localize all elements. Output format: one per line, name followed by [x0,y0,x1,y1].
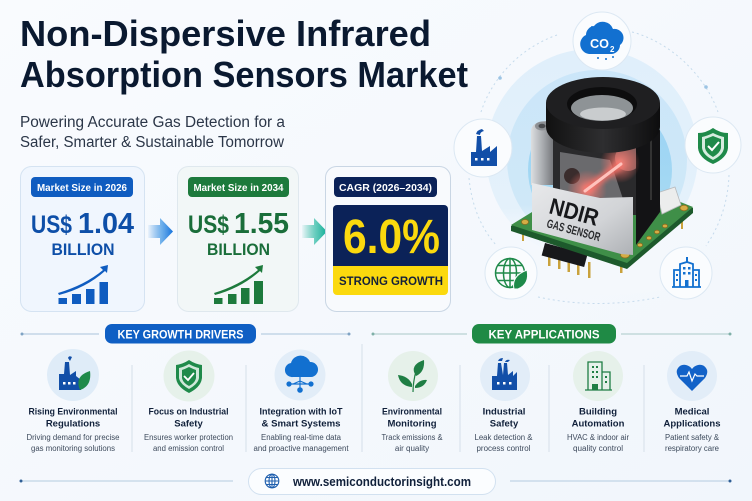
title [20,13,468,95]
application: medical applications: respiratory care [665,444,720,453]
footer: website pill: www.semiconductorinsight.com [292,475,471,489]
left silver column [531,121,553,185]
panel: market size 2026: US$ [31,211,72,239]
laser beam [600,143,640,183]
driver: rising environmental regulations: Driving demand for precise [26,433,120,442]
application: medical applications: Medical [675,406,709,418]
icon: factory [492,358,517,390]
illustration: NDIR gas sensor: GAS SENSOR [545,216,602,244]
application: building automation: quality control [573,444,623,453]
driver: IoT integration: Enabling real-time data [261,433,342,442]
application: environmental monitoring: Monitoring [387,418,437,430]
subtitle: Safer, Smarter & Sustainable Tomorrow [20,134,285,151]
heading: key growth drivers: KEY GROWTH DRIVERS [118,328,244,342]
illustration: NDIR gas sensor: NDIR [547,193,602,231]
driver: IoT integration: Integration with IoT [260,406,343,418]
back interior [553,125,657,215]
pins [522,220,683,278]
panel: market size 2034: 1.55 [234,208,289,240]
panel: market size 2026 [20,166,144,312]
driver: focus on industrial safety [144,350,233,453]
black right column [636,130,660,245]
application: medical applications: Applications [663,418,721,430]
application: industrial safety: Industrial [483,406,525,418]
pcb [511,170,693,269]
application: medical applications [663,351,721,453]
application: environmental monitoring [382,351,443,453]
application: medical applications: Patient safety & [665,433,720,442]
application: industrial safety: Safety [490,418,519,430]
application: building automation: Building [579,406,617,418]
application: environmental monitoring: Track emissions & [382,433,443,442]
panel: CAGR: STRONG GROWTH [339,276,443,288]
panel: market size 2034 [178,166,298,312]
driver: IoT integration: & Smart Systems [262,418,340,430]
icon: buildings [660,247,712,299]
icon: CO2 cloud: 2 [610,45,615,54]
panel: market size 2034: BILLION [207,241,270,259]
arrow: 2034 to CAGR [302,218,327,245]
driver: rising environmental regulations [26,349,120,453]
panel: market size 2034: Market Size in 2034 [194,182,284,194]
driver: rising environmental regulations: Rising Environmental [28,406,118,418]
panel: CAGR: CAGR (2026–2034) [339,182,432,194]
icon: CO2 cloud: CO [590,37,609,51]
icon: globe with leaf [485,247,537,299]
subtitle: Powering Accurate Gas Detection for a [20,114,285,131]
icon: plant [398,360,427,392]
panel: CAGR: 6.0% [343,211,440,264]
driver: rising environmental regulations: Regulations [46,418,100,430]
chart icon: rising bars blue [58,265,108,304]
panel: market size 2026: 1.04 [78,208,134,240]
icon: globe [265,474,279,488]
driver: focus on industrial safety: Ensures worker protection [144,433,233,442]
application: industrial safety: Leak detection & [474,433,533,442]
heading: key growth drivers [20,324,350,344]
application: industrial safety: process control [476,444,531,453]
icon: factory with leaf [59,356,90,390]
driver: focus on industrial safety: and emission control [153,444,224,453]
icon: shield [685,117,741,173]
driver: IoT integration [254,350,349,453]
heading: key applications: KEY APPLICATIONS [488,328,600,342]
driver: rising environmental regulations: gas monitoring solutions [31,444,115,453]
driver: IoT integration: and proactive management [254,444,349,453]
icon: shield [176,360,202,393]
application: industrial safety [474,351,533,453]
application: building automation: Automation [572,418,625,430]
subtitle [20,114,285,151]
connector [657,187,681,214]
icon: cloud network [285,356,318,392]
chart icon: rising bars green [214,265,263,304]
title: Non-Dispersive Infrared [20,13,431,54]
icon: buildings outline [585,362,612,390]
application: environmental monitoring: Environmental [382,406,442,418]
panel: CAGR [326,166,450,312]
driver: focus on industrial safety: Safety [174,418,203,430]
footer: website pill [20,468,732,494]
driver: focus on industrial safety: Focus on Industrial [148,406,228,418]
silver housing [532,183,633,255]
heading: key applications [372,324,732,344]
icon: factory [454,119,512,177]
arrow: 2026 to 2034 [148,218,173,245]
dividers [132,344,644,452]
panel: market size 2026: BILLION [52,241,114,259]
application: environmental monitoring: air quality [395,444,429,453]
application: building automation [567,351,629,453]
title: Absorption Sensors Market [20,54,468,95]
panel: market size 2034: US$ [188,211,229,239]
illustration: NDIR gas sensor [511,77,693,278]
cap [546,103,660,153]
illustration: sensor glow backdrop [469,32,729,304]
icon: heart with pulse [677,365,707,391]
panel: market size 2026: Market Size in 2026 [37,182,127,194]
icon: CO2 cloud [573,12,631,70]
application: building automation: HVAC & indoor air [567,433,629,442]
